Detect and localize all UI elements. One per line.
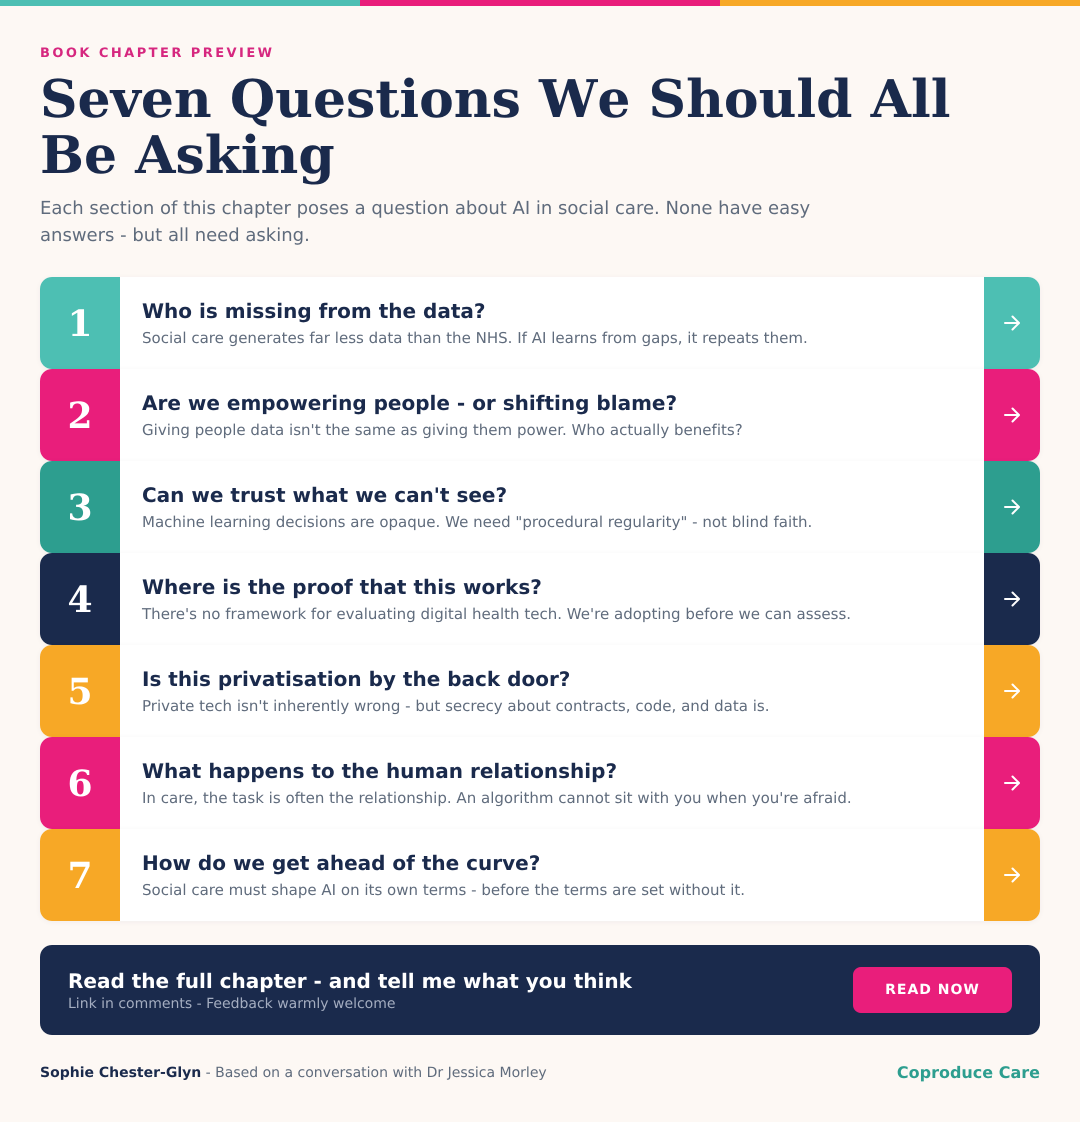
question 1: Who is missing from the data? xyxy=(142,299,486,323)
call to action subtext: Link in comments - Feedback warmly welcome xyxy=(68,996,395,1012)
subtitle: answers - but all need asking. xyxy=(40,225,310,246)
question 1 xyxy=(40,277,1040,369)
question 2: Giving people data isn't the same as giving them power. Who actually benefits? xyxy=(142,421,743,439)
question 5: 5 xyxy=(67,671,93,713)
subtitle: Each section of this chapter poses a question about AI in social care. None have easy xyxy=(40,198,810,219)
question 5 xyxy=(40,645,1040,737)
question 1: Social care generates far less data than the NHS. If AI learns from gaps, it repeats them. xyxy=(142,329,808,347)
kicker: BOOK CHAPTER PREVIEW xyxy=(40,46,274,61)
question 7: How do we get ahead of the curve? xyxy=(142,851,540,875)
question 1: 1 xyxy=(67,303,93,345)
subtitle xyxy=(40,198,810,246)
call to action panel xyxy=(40,945,1040,1035)
question 2: Are we empowering people - or shifting blame? xyxy=(142,391,677,415)
question 3: Machine learning decisions are opaque. We need "procedural regularity" - not blind faith. xyxy=(142,513,812,531)
question 4: 4 xyxy=(67,579,93,621)
question 4: There's no framework for evaluating digital health tech. We're adopting before we can assess. xyxy=(142,605,851,623)
call to action heading: Read the full chapter - and tell me what you think xyxy=(68,969,632,993)
question 4: Where is the proof that this works? xyxy=(142,575,542,599)
title xyxy=(40,69,950,186)
question 4 xyxy=(40,553,1040,645)
question 5: Is this privatisation by the back door? xyxy=(142,667,570,691)
title: Be Asking xyxy=(40,125,335,186)
question 6: 6 xyxy=(67,763,93,805)
question 2: 2 xyxy=(67,395,93,437)
question 6 xyxy=(40,737,1040,829)
question 5: Private tech isn't inherently wrong - but secrecy about contracts, code, and data is. xyxy=(142,697,770,715)
read now button xyxy=(853,967,1012,1013)
question 6: In care, the task is often the relationship. An algorithm cannot sit with you when you're afraid. xyxy=(142,789,852,807)
question 3: 3 xyxy=(67,487,93,529)
top colour bar xyxy=(0,0,1080,6)
question 3 xyxy=(40,461,1040,553)
author credit: Sophie Chester-Glyn - Based on a conversation with Dr Jessica Morley xyxy=(40,1065,547,1081)
read now button: READ NOW xyxy=(885,982,980,998)
brand name: Coproduce Care xyxy=(897,1063,1040,1082)
question 7: 7 xyxy=(67,855,93,897)
question 7: Social care must shape AI on its own terms - before the terms are set without it. xyxy=(142,881,745,899)
question 6: What happens to the human relationship? xyxy=(142,759,617,783)
question 3: Can we trust what we can't see? xyxy=(142,483,507,507)
title: Seven Questions We Should All xyxy=(40,69,950,130)
question 2 xyxy=(40,369,1040,461)
question 7 xyxy=(40,829,1040,921)
